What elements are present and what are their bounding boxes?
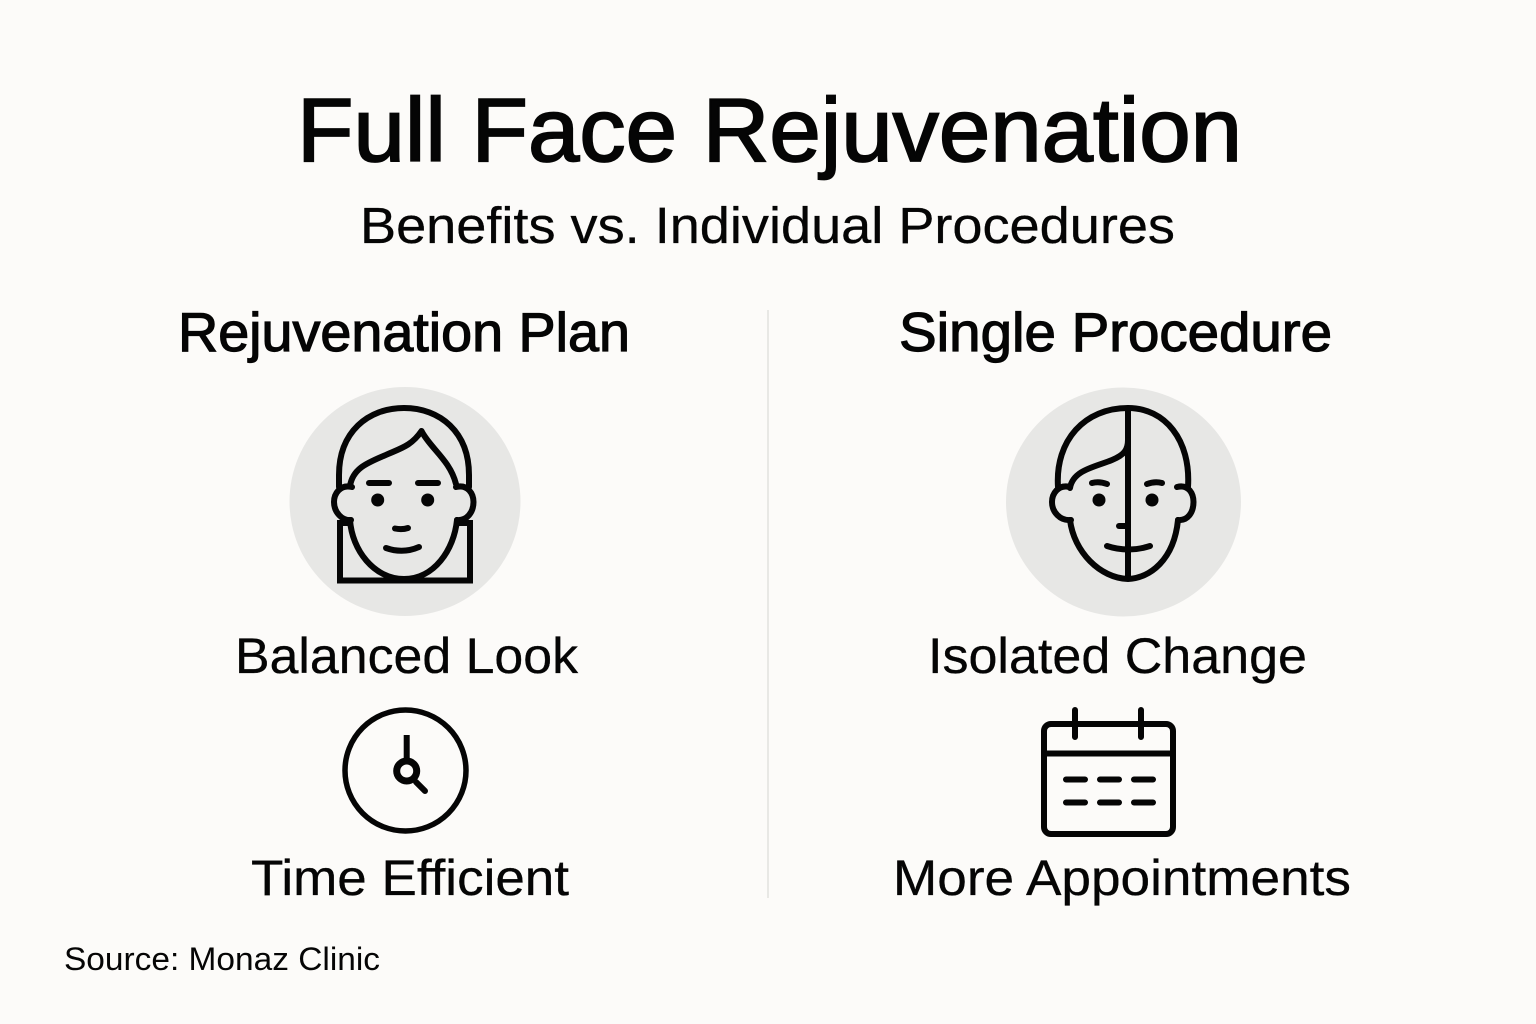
subtitle: Benefits vs. Individual Procedures [360,197,1175,254]
heading: single procedure: Single Procedure [899,301,1332,363]
icon: clock [345,710,466,831]
panel: rejuvenation plan [178,301,630,906]
label: time efficient: Time Efficient [251,850,569,906]
title: Full Face Rejuvenation [297,81,1242,181]
panel: single procedure [893,301,1351,906]
source note: Source: Monaz Clinic [64,941,380,977]
icon: half face [1006,388,1241,616]
heading: rejuvenation plan: Rejuvenation Plan [178,301,630,363]
icon: full face [290,387,520,616]
icon: calendar [1044,710,1173,834]
label: balanced look: Balanced Look [235,628,579,684]
label: isolated change: Isolated Change [928,628,1307,684]
label: more appointments: More Appointments [893,850,1351,906]
